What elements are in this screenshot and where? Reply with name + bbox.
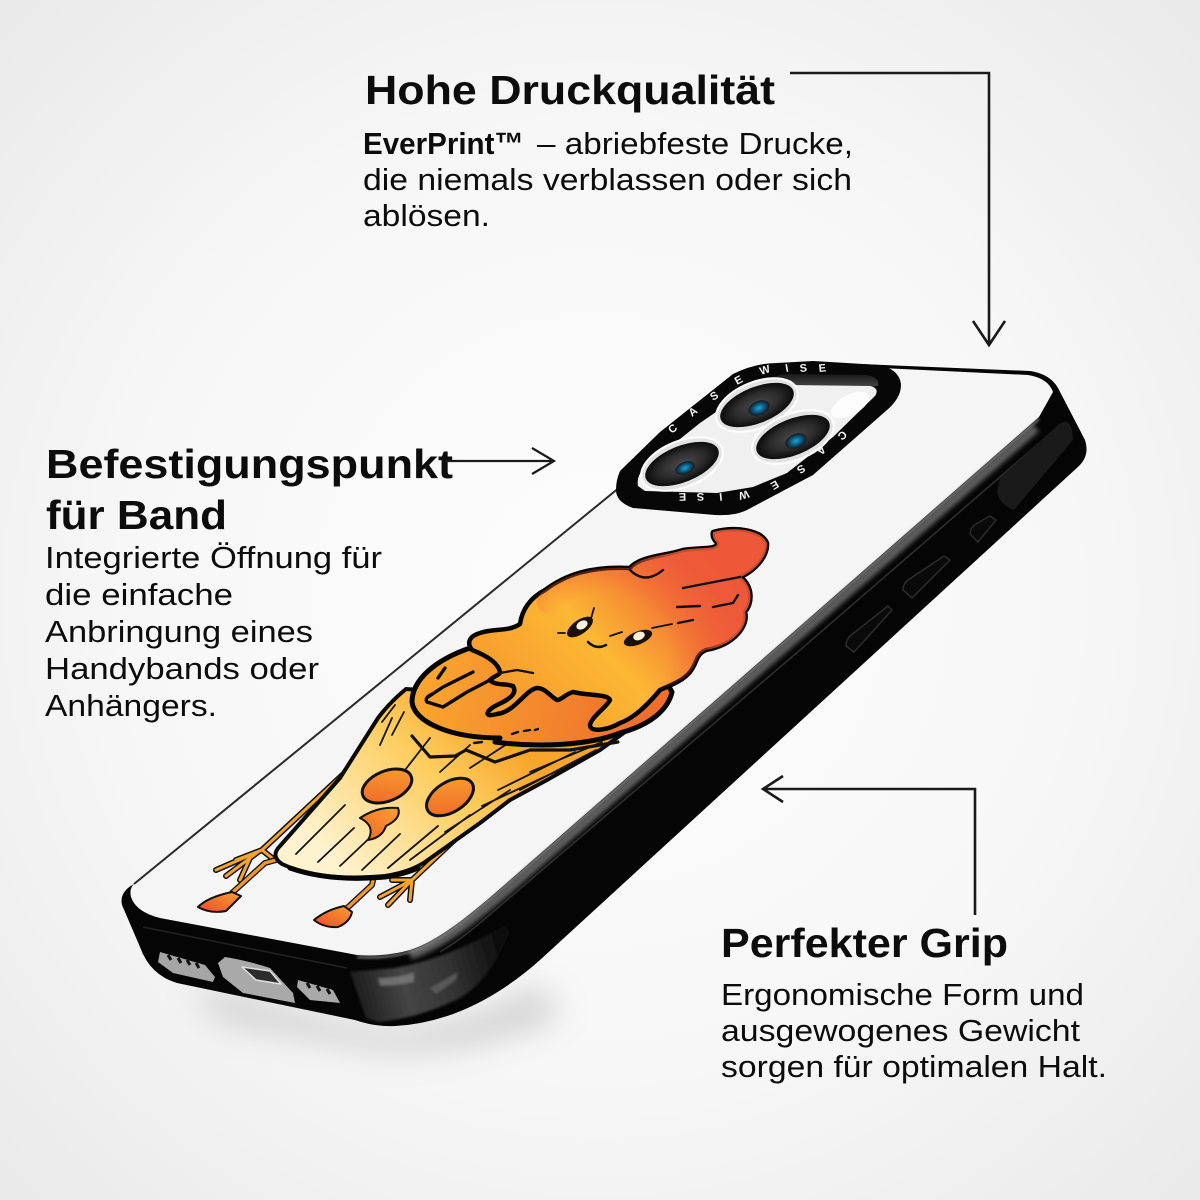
volume up button — [903, 556, 950, 598]
island frame — [616, 361, 901, 515]
left eye white — [575, 619, 589, 631]
USB port — [218, 957, 295, 1003]
wrapper top trim — [412, 736, 618, 762]
lens iris — [673, 459, 697, 477]
case body — [122, 364, 1087, 1026]
right leg colour — [345, 862, 377, 910]
heading: Perfekter Grip — [721, 920, 1008, 966]
side button dark panel — [997, 422, 1073, 510]
body text — [45, 540, 382, 723]
side groove line — [440, 432, 1052, 952]
body text: Handybands oder — [45, 651, 319, 686]
right foot — [314, 906, 352, 927]
right leg — [345, 862, 377, 910]
body text: Ergonomische Form und — [721, 977, 1084, 1012]
body text: Integrierte Öffnung für — [45, 540, 382, 575]
body text — [721, 977, 1107, 1084]
gloss highlight two — [430, 972, 458, 994]
arrow: grip — [763, 776, 975, 915]
heading — [46, 441, 453, 538]
body text: Anhängers. — [45, 688, 217, 723]
body text: – abriebfeste Drucke, — [537, 126, 853, 161]
callout: print quality — [363, 67, 853, 233]
scoop swirl — [469, 529, 767, 730]
spot three — [360, 808, 399, 840]
body text: ablösen. — [363, 198, 490, 233]
left eye — [564, 613, 596, 641]
corner gloss — [350, 925, 510, 1022]
lens left — [634, 427, 730, 501]
callout: grip — [721, 920, 1107, 1084]
lens top — [709, 368, 805, 442]
left foot — [198, 892, 241, 912]
body text: die einfache — [45, 577, 233, 612]
spot two — [420, 771, 480, 823]
wrapper folds — [296, 705, 602, 870]
arrow: print quality — [790, 73, 1005, 345]
right eye white — [632, 630, 646, 642]
speaker holes — [307, 983, 330, 994]
lens right — [745, 400, 841, 474]
left edge line — [134, 487, 620, 884]
base dashes — [474, 729, 538, 743]
spot one — [357, 762, 417, 810]
arrow: strap attachment — [445, 448, 554, 474]
left leg colour — [232, 852, 305, 893]
camera island — [616, 361, 901, 515]
camera window — [638, 384, 877, 493]
brand text bottom: CASEWISE — [679, 428, 849, 502]
action button — [970, 516, 996, 542]
swirl edge tint — [537, 529, 767, 690]
port opening — [242, 967, 281, 984]
illustration: ice cream cupcake — [198, 529, 767, 927]
back face — [130, 367, 1053, 955]
body text: Anbringung eines — [45, 614, 313, 649]
lens glass — [714, 374, 800, 436]
left drip stroke — [426, 668, 490, 707]
callout: strap attachment — [45, 441, 453, 723]
lens glass — [750, 406, 836, 468]
body text: sorgen für optimalen Halt. — [721, 1049, 1107, 1084]
scoop base — [412, 648, 672, 745]
lens iris — [746, 397, 772, 419]
body text: die niemals verblassen oder sich — [363, 162, 852, 197]
left speaker — [158, 952, 215, 982]
bottom groove line — [143, 927, 347, 968]
right arm — [380, 795, 502, 905]
heading: Befestigungspunkt — [46, 441, 453, 487]
lens iris — [783, 430, 809, 452]
body text — [363, 126, 853, 233]
left arm — [216, 768, 350, 880]
gloss highlight one — [378, 972, 414, 986]
right eye — [622, 626, 654, 650]
right arm colour — [380, 795, 502, 905]
swirl crease — [500, 570, 740, 673]
heading: für Band — [46, 492, 227, 538]
body text: EverPrint™ — [363, 126, 524, 161]
side sheen — [410, 428, 1036, 955]
lens glass — [639, 433, 725, 495]
phone drop shadow — [190, 985, 560, 1051]
inner top shading — [745, 374, 878, 392]
face rim highlight — [357, 419, 1039, 957]
mouth — [588, 642, 606, 647]
body text: ausgewogenes Gewicht — [721, 1013, 1080, 1048]
heading: Hohe Druckqualität — [365, 67, 775, 113]
left leg — [232, 852, 305, 893]
volume down button — [846, 606, 892, 652]
brows — [558, 608, 672, 636]
speaker holes — [168, 955, 199, 968]
cupcake wrapper — [275, 689, 625, 878]
right speaker — [297, 980, 340, 1003]
flash — [827, 386, 873, 424]
left arm colour — [216, 768, 350, 880]
brand text top: CASEWISE — [666, 362, 827, 436]
wrapper bottom edge — [290, 868, 418, 878]
phone case — [122, 364, 1087, 1026]
